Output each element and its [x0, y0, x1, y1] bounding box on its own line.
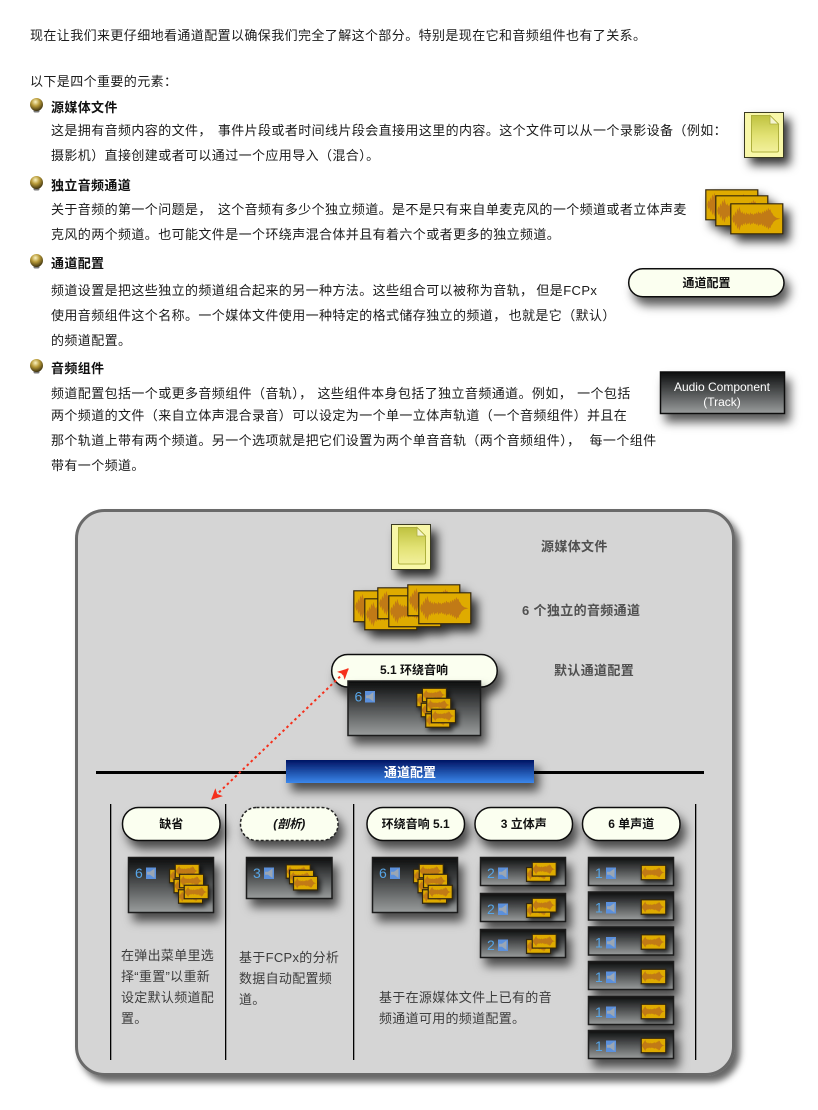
track box: default 6 channels: 6: [354, 688, 362, 704]
pill: channel configuration: [629, 269, 784, 297]
heading: source media file: 源媒体文件: [51, 100, 118, 115]
text: default description: 择“重置”以重新: [121, 969, 210, 984]
section: source media file: [30, 98, 784, 163]
box: audio component track: (Track): [703, 395, 741, 409]
body: channel configuration: 的频道配置。: [51, 333, 131, 348]
body: channel configuration: 使用音频组件这个名称。一个媒体文件使用一种特定的格式储存独立的频道，也就是它（默认）: [51, 308, 616, 323]
banner: channel configuration: [286, 760, 534, 783]
body: source media file: 这是拥有音频内容的文件， 事件片段或者时间线片段会直接用这里的内容。这个文件可以从一个录影设备（例如：: [51, 123, 727, 138]
heading: channel configuration: 通道配置: [51, 256, 104, 271]
track box: mono 1: [588, 858, 674, 886]
track box: mono 1: 1: [595, 865, 603, 881]
label: source media file: 源媒体文件: [541, 539, 608, 554]
pill: default: 缺省: [159, 816, 183, 831]
pill: analyze: [240, 808, 338, 840]
track box: 6 channels: [128, 858, 214, 912]
track box: mono 2: [588, 892, 674, 920]
column: default: [121, 808, 220, 1026]
pill: 5.1 surround: 5.1 环绕音响: [380, 662, 448, 677]
label: six channels: 6 个独立的音频通道: [522, 603, 640, 618]
column dividers: [110, 804, 696, 1060]
divider line: [96, 771, 704, 774]
icon: waveform stack: [706, 190, 783, 234]
column: analyze: [239, 808, 339, 1007]
section: audio component: [30, 359, 784, 473]
intro text: 现在让我们来更仔细地看通道配置以确保我们完全了解这个部分。特别是现在它和音频组件也有了关系。: [30, 28, 646, 43]
panel: diagram: [76, 510, 734, 1074]
icon: file: [744, 112, 784, 158]
pill: analyze: (剖析): [273, 817, 305, 831]
column: surround 5.1: [367, 808, 464, 912]
text: analyze description: 道。: [239, 992, 266, 1007]
track box: mono 4: [588, 962, 674, 990]
track box: stereo 2: 2: [487, 901, 495, 917]
track box: mono 6: [588, 1030, 674, 1058]
body: source media file: 摄影机）直接创建或者可以通过一个应用导入（混合）。: [51, 148, 380, 163]
icon: bullet 4: [30, 359, 43, 374]
pill: surround 5.1: 环绕音响 5.1: [382, 816, 450, 831]
list intro: 以下是四个重要的元素：: [30, 74, 177, 89]
heading: independent channels: 独立音频通道: [51, 178, 131, 193]
track box: mono 3: 1: [595, 934, 603, 950]
track box: stereo 3: 2: [487, 937, 495, 953]
panel background: [76, 510, 734, 1074]
text: analyze description: 基于FCPx的分析: [239, 950, 339, 965]
text: configuration description: 频通道可用的频道配置。: [379, 1011, 525, 1026]
pill: channel configuration: 通道配置: [682, 275, 731, 290]
column: 3 stereo: [475, 808, 572, 958]
track box: 6 channels: 6: [135, 865, 143, 881]
track box: mono 4: 1: [595, 969, 603, 985]
icon: six waveforms: [354, 585, 471, 630]
text: default description: 置。: [121, 1011, 148, 1026]
section: channel configuration: [30, 254, 784, 348]
body: audio component: 带有一个频道。: [51, 458, 145, 473]
body: channel configuration: 频道设置是把这些独立的频道组合起来的另一种方法。这些组合可以被称为音轨，但是FCPx: [51, 283, 597, 298]
text: analyze description: 数据自动配置频: [239, 971, 332, 986]
pill: 3 stereo: 3 立体声: [501, 816, 547, 831]
track box: 3 channels: [246, 858, 332, 898]
section: independent audio channels: [30, 176, 783, 242]
box: audio component track: [660, 372, 784, 414]
body: audio component: 频道配置包括一个或更多音频组件（音轨）， 这些组件本身包括了独立音频通道。例如， 一个包括: [51, 386, 631, 401]
heading: audio component: 音频组件: [51, 361, 104, 376]
track box: stereo 2: [480, 894, 566, 922]
track box: stereo 1: [480, 858, 566, 886]
body: independent channels: 关于音频的第一个问题是， 这个音频有多少个独立频道。是不是只有来自单麦克风的一个频道或者立体声麦: [51, 202, 687, 217]
track box: mono 2: 1: [595, 900, 603, 916]
pill: default: [122, 808, 220, 840]
pill: 6 mono: 6 单声道: [608, 816, 654, 831]
text: default description: 在弹出菜单里选: [121, 948, 214, 963]
text: configuration description: 基于在源媒体文件上已有的音: [379, 990, 552, 1005]
icon: bullet 3: [30, 254, 43, 268]
track box: stereo 3: [480, 930, 566, 958]
body: independent channels: 克风的两个频道。也可能文件是一个环绕声混合体并且有着六个或者更多的独立频道。: [51, 227, 560, 242]
track box: mono 6: 1: [595, 1038, 603, 1054]
track box: mono 5: 1: [595, 1004, 603, 1020]
banner: channel configuration: 通道配置: [384, 765, 436, 780]
pill: 5.1 surround: [332, 654, 497, 687]
body: audio component: 两个频道的文件（来自立体声混合录音）可以设定为一个单一立体声轨道（一个音频组件）并且在: [51, 408, 627, 423]
text: default description: 设定默认频道配: [121, 990, 214, 1005]
track box: mono 5: [588, 996, 674, 1024]
label: default channel configuration: 默认通道配置: [554, 663, 634, 678]
body: audio component: 每一个组件: [590, 433, 657, 448]
track box: default 6 channels: [348, 681, 480, 736]
column: 6 mono: [582, 808, 680, 1058]
track box: mono 3: [588, 927, 674, 955]
track box: 3 channels: 3: [253, 865, 261, 881]
icon: bullet 1: [30, 98, 43, 112]
icon: bullet 2: [30, 176, 43, 190]
track box: stereo 1: 2: [487, 865, 495, 881]
pill: 6 mono: [582, 808, 680, 840]
arrow: dashed link: [212, 669, 348, 799]
box: audio component track: Audio Component: [674, 380, 771, 394]
body: audio component: 那个轨道上带有两个频道。另一个选项就是把它们设置为两个单音音轨（两个音频组件），: [51, 433, 581, 448]
track box: 6 channels: 6: [379, 865, 387, 881]
pill: 3 stereo: [475, 808, 572, 840]
icon: source file: [392, 524, 430, 570]
